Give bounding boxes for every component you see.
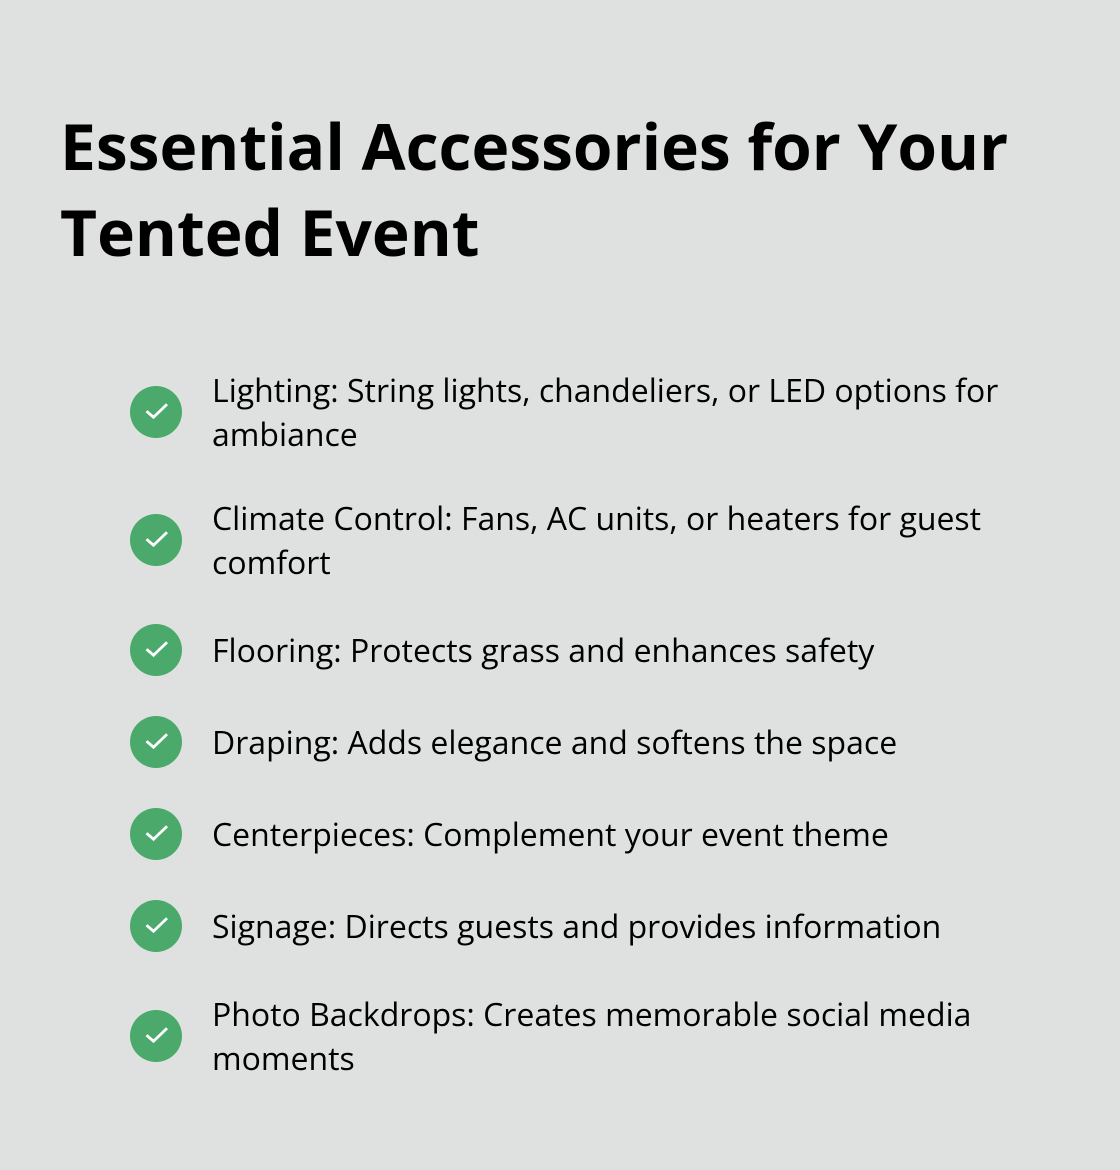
title: Tented Event <box>60 188 480 275</box>
checklist <box>130 369 998 1080</box>
item: flooring: Flooring: Protects grass and enhances safety <box>212 629 874 672</box>
item: draping: Draping: Adds elegance and softens the space <box>212 721 897 764</box>
item: climate control <box>130 497 981 584</box>
item: lighting: ambiance <box>212 413 358 456</box>
item: climate control: Climate Control: Fans, AC units, or heaters for guest <box>212 497 981 540</box>
item: signage: Signage: Directs guests and provides information <box>212 905 941 948</box>
item: photo backdrops: moments <box>212 1037 355 1080</box>
item: photo backdrops: Photo Backdrops: Creates memorable social media <box>212 993 971 1036</box>
item: centerpieces: Centerpieces: Complement your event theme <box>212 813 889 856</box>
item: climate control: comfort <box>212 541 331 584</box>
item: lighting <box>130 369 998 456</box>
title: Essential Accessories for Your <box>60 102 1008 189</box>
item: photo backdrops <box>130 993 971 1080</box>
title <box>60 102 1008 275</box>
item: lighting: Lighting: String lights, chandeliers, or LED options for <box>212 369 998 412</box>
